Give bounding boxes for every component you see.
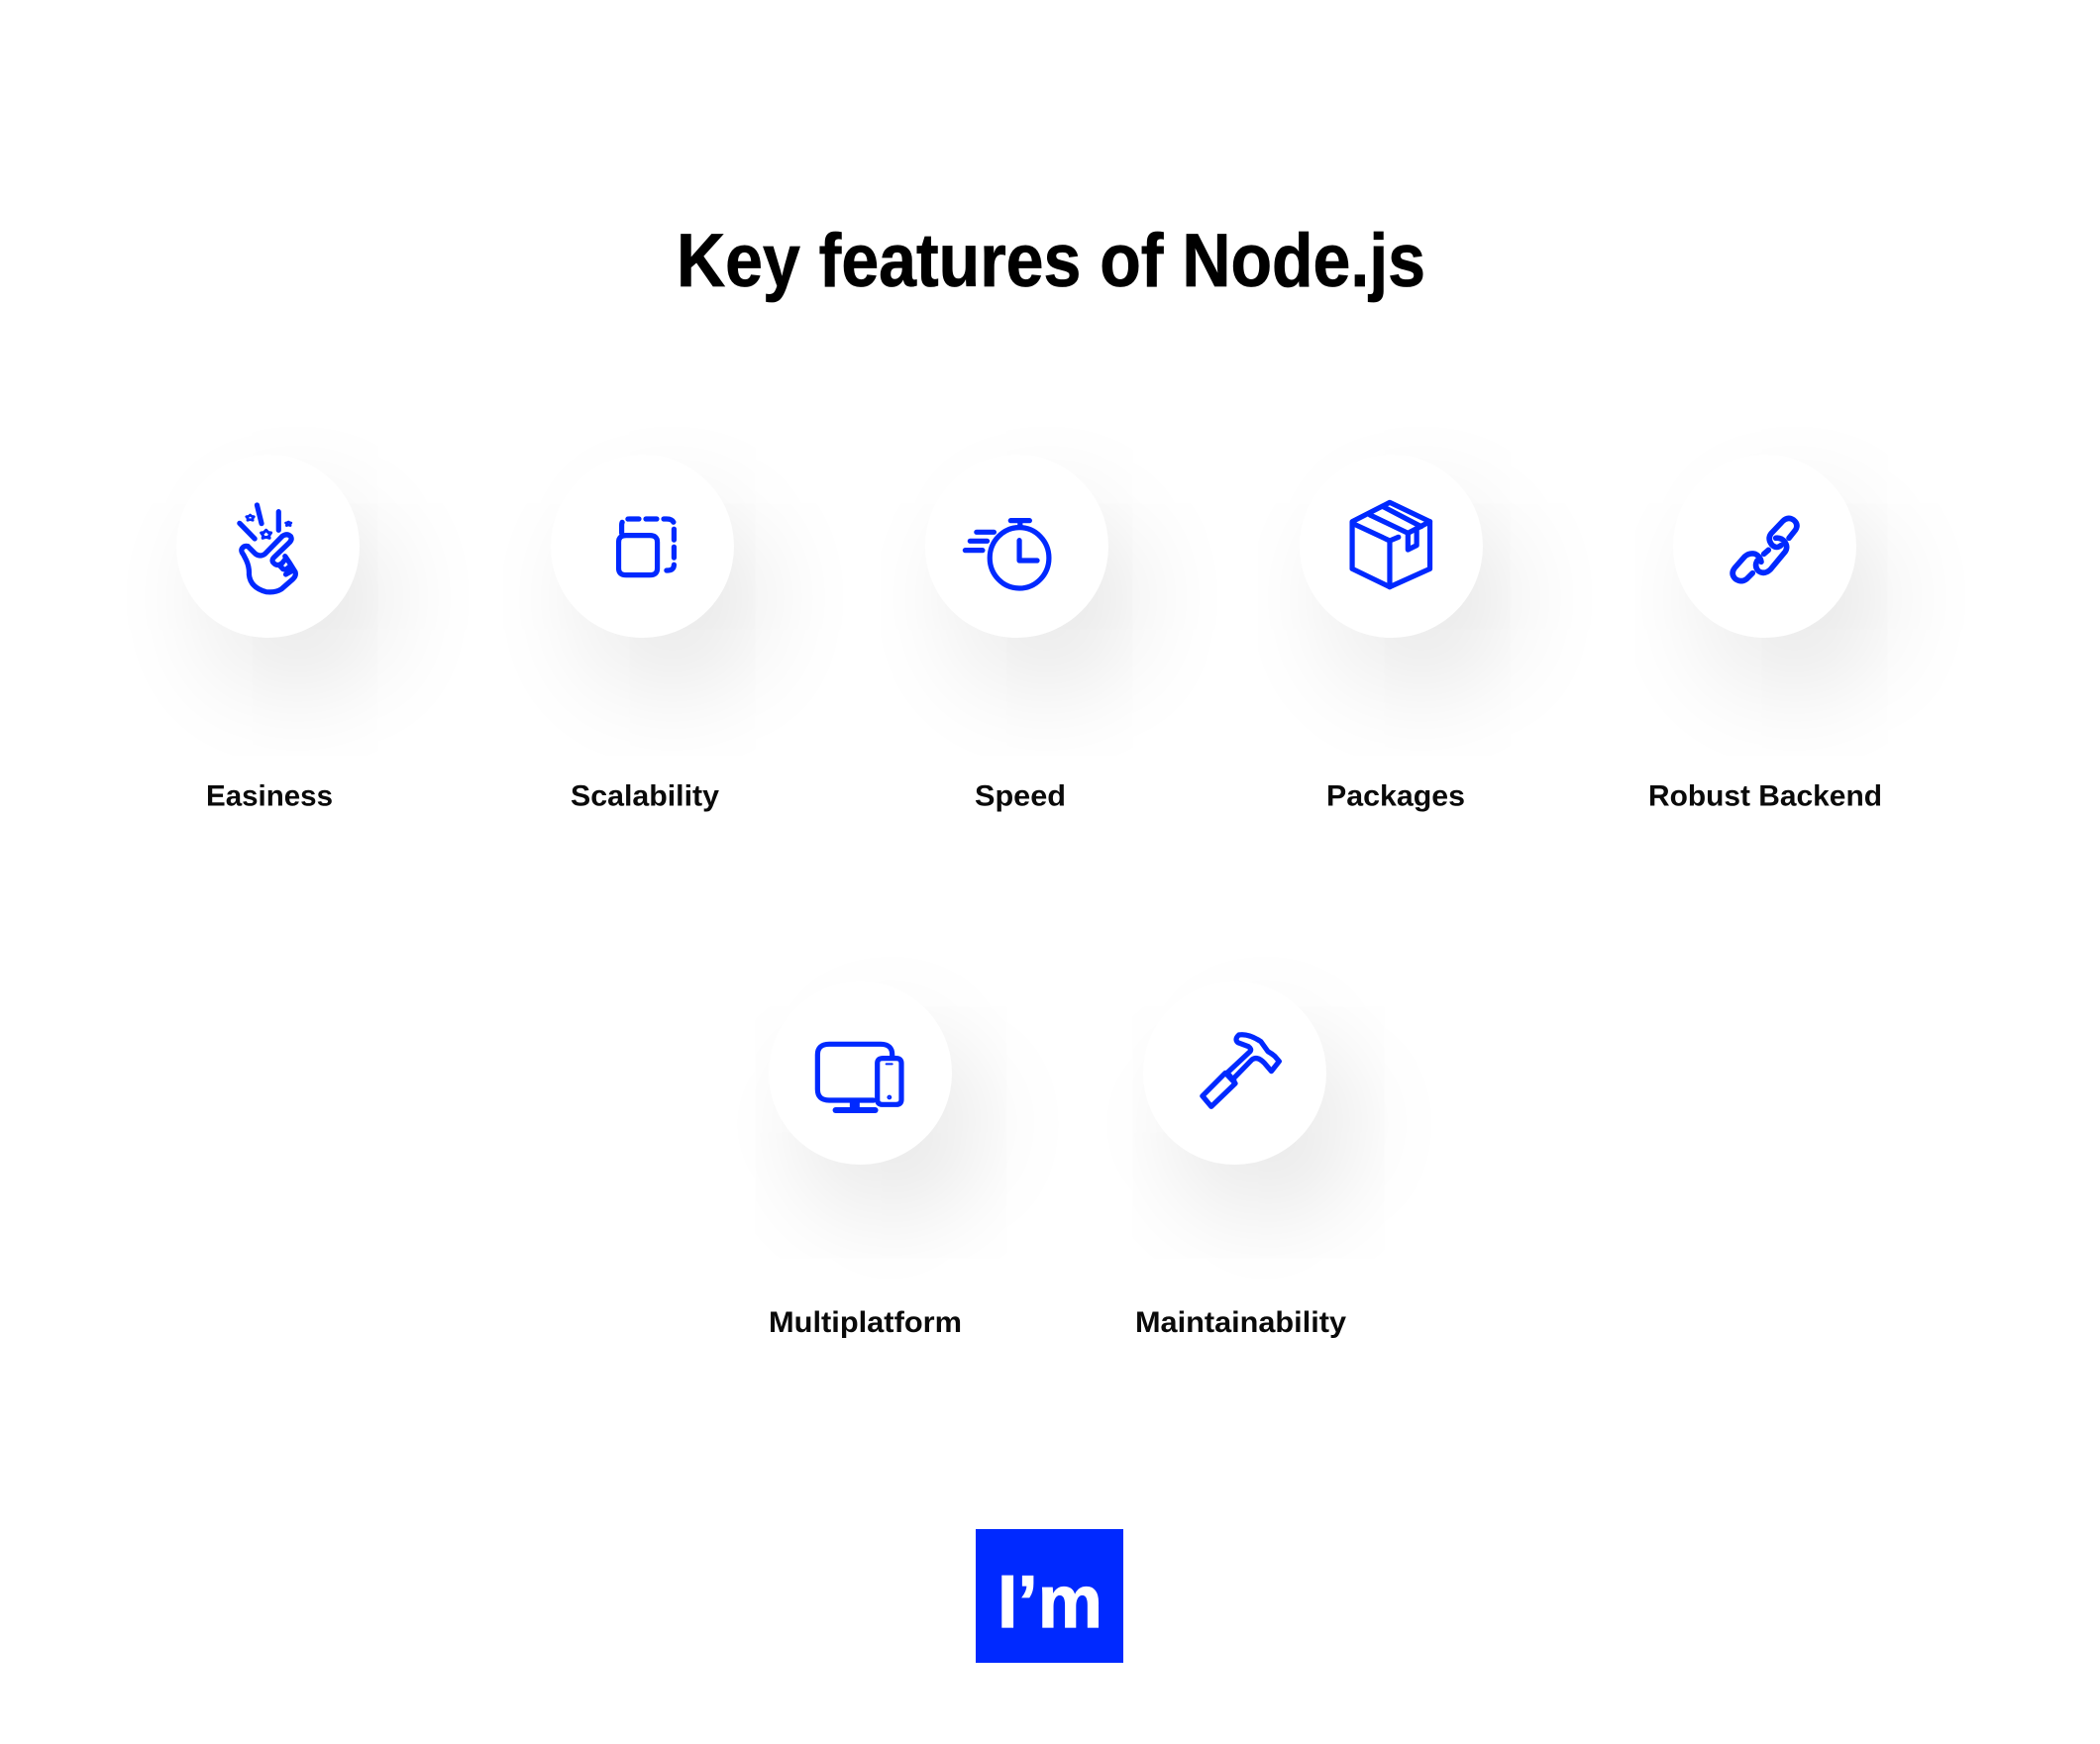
panel: Scalability (571, 516, 758, 812)
panel: Speed (953, 518, 1133, 812)
title: Key features of Node.js (677, 219, 1425, 303)
panel: Maintainability (1135, 1032, 1362, 1339)
icon circle: Maintainability (1143, 981, 1326, 1165)
logo: I’m (998, 1560, 1102, 1643)
icon circle: Speed (925, 455, 1108, 638)
panel: Robust Backend (1648, 515, 1888, 812)
label: Packages: Packages (1326, 780, 1465, 812)
icon: hammer (1200, 1032, 1282, 1109)
label: Multiplatform: Multiplatform (769, 1306, 962, 1339)
panel: Multiplatform (769, 1042, 988, 1339)
label: Scalability: Scalability (571, 780, 719, 812)
icon circle: Packages (1300, 455, 1483, 638)
icon circle: Multiplatform (769, 981, 952, 1165)
logo (976, 1529, 1123, 1663)
panel: Easiness (204, 502, 386, 812)
label: Easiness: Easiness (206, 780, 333, 812)
icon circle: Robust Backend (1673, 455, 1856, 638)
icon: scaling squares (616, 516, 678, 578)
icon: package box (1349, 499, 1432, 590)
label: Speed: Speed (975, 780, 1066, 812)
icon circle: Scalability (551, 455, 734, 638)
label: Robust Backend: Robust Backend (1648, 780, 1882, 812)
label: Maintainability: Maintainability (1135, 1306, 1346, 1339)
icon: chain link (1730, 515, 1800, 584)
icon: snapping fingers (237, 502, 298, 594)
icon: stopwatch (963, 518, 1052, 591)
icon: monitor and phone (814, 1042, 904, 1113)
panel: Packages (1326, 499, 1510, 812)
icon circle: Easiness (176, 455, 360, 638)
